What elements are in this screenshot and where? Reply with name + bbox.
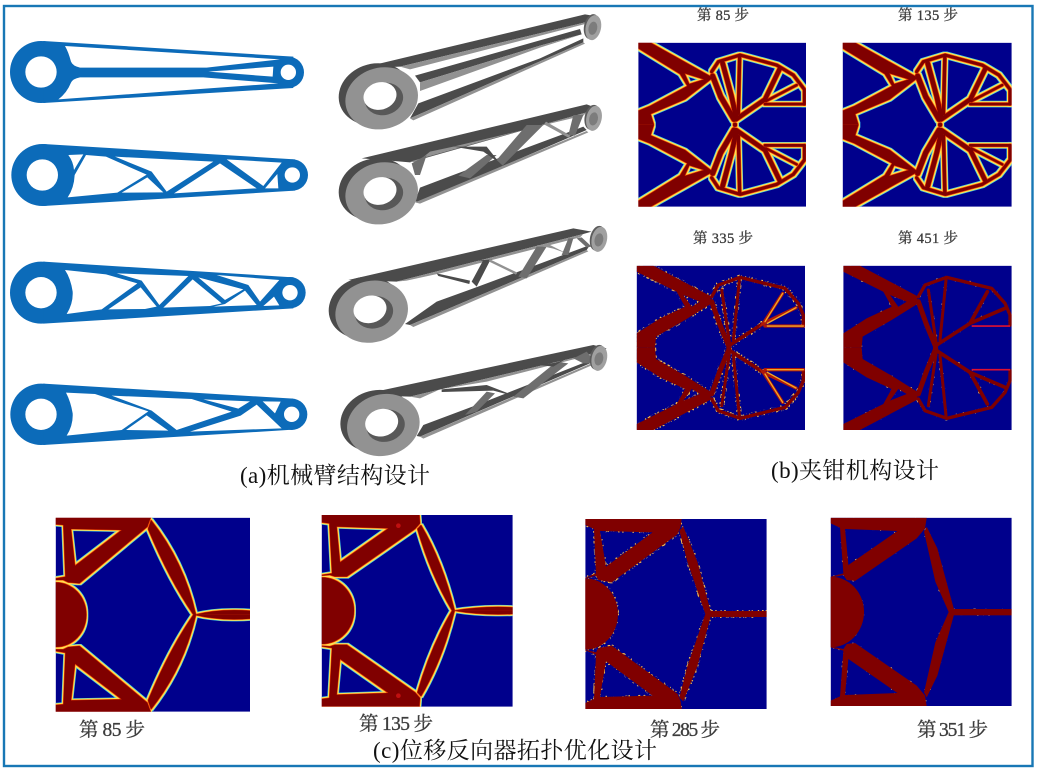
label: step 285: 第 285 步 xyxy=(650,719,720,741)
heading: gripper step 451: 第 451 步 xyxy=(898,230,958,247)
blue arm 4 xyxy=(10,384,307,445)
label: step 351: 第 351 步 xyxy=(917,719,988,741)
gray 3D arm 3 xyxy=(322,224,609,351)
caption: (c): (c)位移反向器拓扑优化设计 xyxy=(373,738,657,763)
heatmap: gripper step 335 xyxy=(636,266,805,430)
heading: gripper step 135: 第 135 步 xyxy=(898,7,958,24)
gray 3D arm 4 xyxy=(333,343,609,464)
panel: mechanical arm 3D models xyxy=(322,13,609,464)
heatmap: gripper step 451 xyxy=(843,266,1012,430)
label: step 135: 第 135 步 xyxy=(359,713,433,735)
heatmap: gripper step 135 xyxy=(842,42,1012,207)
heatmap: inverter step 351 xyxy=(830,518,1012,706)
gray 3D arm 2 xyxy=(332,103,604,232)
blue arm 1 xyxy=(10,41,304,103)
heading: gripper step 335: 第 335 步 xyxy=(693,230,753,247)
gray 3D arm 1 xyxy=(332,13,603,137)
panel: mechanical arm 2D designs xyxy=(10,41,308,445)
heatmap: inverter step 85 xyxy=(56,518,250,712)
blue arm 2 xyxy=(11,144,308,206)
heading: gripper step 85: 第 85 步 xyxy=(697,7,749,24)
heatmap: inverter step 285 xyxy=(585,519,767,709)
caption: (b): (b)夹钳机构设计 xyxy=(771,458,939,483)
label: step 85: 第 85 步 xyxy=(79,719,145,741)
blue arm 3 xyxy=(10,262,306,324)
heatmap: gripper step 85 xyxy=(638,42,806,207)
caption: (a): (a)机械臂结构设计 xyxy=(240,463,430,488)
heatmap: inverter step 135 xyxy=(322,515,513,707)
